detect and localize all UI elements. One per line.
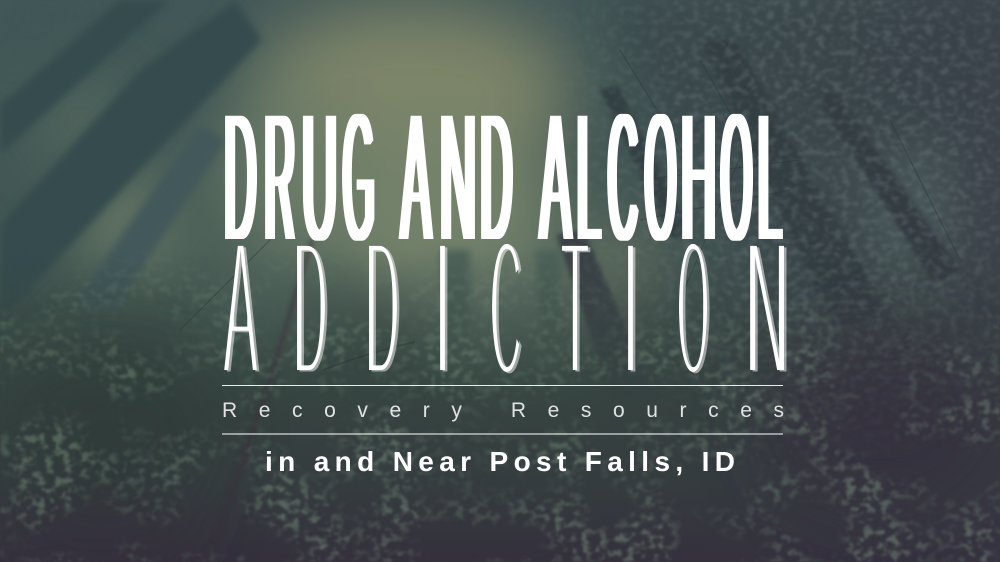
letter shadow layer: T [564,200,591,418]
green foliage texture [0,284,1000,562]
canopy shade right [0,0,1000,330]
infographic canvas: O [721,75,752,281]
letter front layer: D [293,199,327,417]
title: Drug and Alcohol: C [608,75,638,281]
title: Drug and Alcohol: N [440,75,476,281]
title: Drug and Alcohol: R [265,75,295,281]
title: Drug and Alcohol: L [577,75,600,281]
title: Drug and Alcohol: D [480,75,512,281]
title: Drug and Alcohol: U [302,75,337,281]
title: Drug and Alcohol: D [224,75,256,281]
thin branches [180,50,960,370]
title: Drug and Alcohol: A [401,75,431,281]
distant pale trunks [440,250,560,370]
letter shadow layer: D [368,200,402,418]
letter front layer: T [561,199,589,417]
title: Drug and Alcohol: O [645,75,676,281]
letter front layer: I [435,199,450,417]
tree trunks left [0,0,262,322]
title: Drug and Alcohol: A [540,75,571,281]
infographic canvas: N [748,200,791,418]
letter shadow layer: I [626,200,640,418]
letter shadow layer: A [226,200,260,418]
undergrowth shade [0,330,1000,562]
letter front layer: C [490,199,522,417]
forest floor [0,250,1000,562]
letter front layer: D [365,199,399,417]
letter shadow layer [226,200,791,418]
title: Drug and Alcohol [224,75,781,281]
title: Drug and Alcohol: G [343,75,374,281]
tree trunks right [556,40,960,395]
title: Addiction, thin letters with offset shadow [223,199,791,418]
title: Drug and Alcohol: H [681,75,716,281]
location line: in and Near Post Falls, ID [265,446,735,477]
letter front layer: A [223,199,258,417]
letter front layer [223,199,789,417]
letter front layer: O [677,199,709,417]
letter shadow layer: C [492,200,524,418]
letter shadow layer: O [680,200,712,418]
dark branch texture [608,0,1000,392]
letter shadow layer: D [296,200,330,418]
letter front layer: I [623,199,638,417]
top divider line [222,385,783,386]
infographic canvas: N [745,199,789,417]
letter shadow layer: I [438,200,452,418]
subtitle: Recovery Resources: Recovery Resources [222,399,784,422]
infographic canvas: L [758,75,781,281]
bottom divider line [222,433,783,435]
misty light glow [35,5,970,375]
